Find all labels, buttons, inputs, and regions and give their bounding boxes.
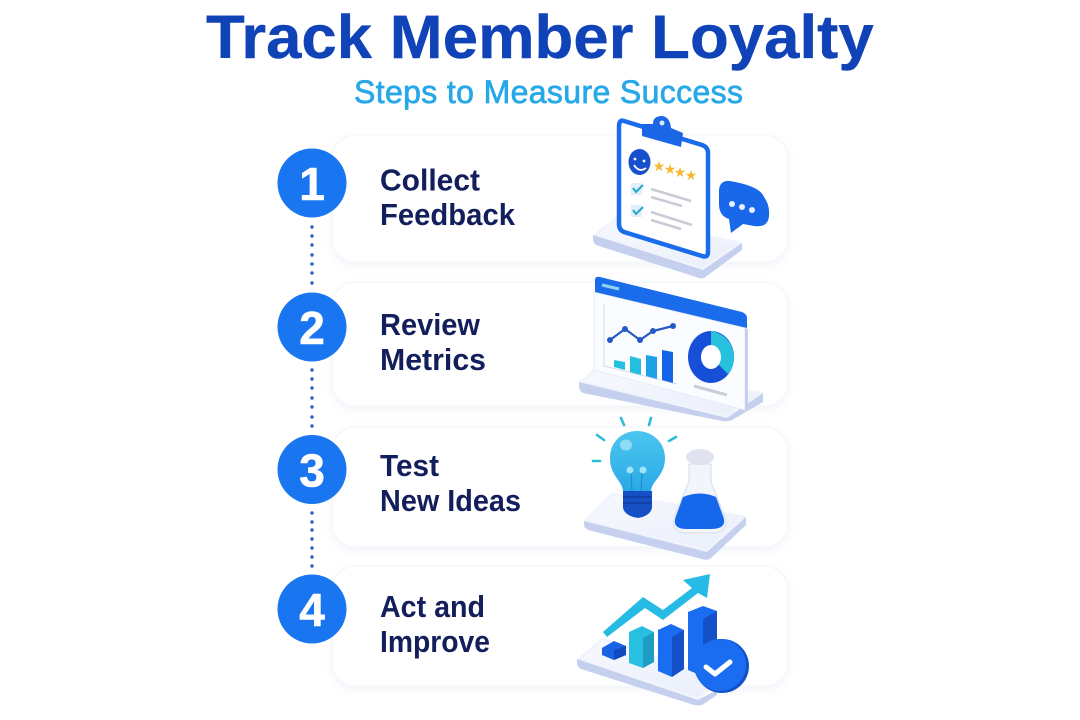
badge 3: 3 [299,444,325,496]
icon: clipboard with feedback: ★ [653,159,665,175]
badge 3 [278,435,346,504]
label: Collect Feedback: Feedback [380,197,516,232]
icon: clipboard with feedback: ★ [664,162,676,178]
label: Act and Improve: Improve [380,624,490,659]
label: Test New Ideas: New Ideas [380,483,521,518]
label: Review Metrics [380,307,486,377]
panel: step 2 [278,277,788,421]
label: Collect Feedback [380,162,516,232]
subtitle: Steps to Measure Success [354,74,743,110]
label: Test New Ideas [380,448,521,518]
badge 2: 2 [299,302,325,354]
icon: clipboard with feedback [593,116,769,278]
panel: step 1 [278,116,788,278]
card 2 [332,282,788,406]
icon: growth chart with check [577,574,749,706]
label: Act and Improve [380,589,490,659]
label: Collect Feedback: Collect [380,162,480,198]
label: Review Metrics: Review [380,307,481,342]
icon: clipboard with feedback: ★ [674,165,686,181]
badge 4 [278,574,346,644]
card 4 [332,566,788,686]
title: Track Member Loyalty [206,4,874,72]
label: Review Metrics: Metrics [380,342,486,377]
label: Act and Improve: Act and [380,589,485,624]
icon: clipboard with feedback: ★ [685,168,697,184]
badge 2 [278,292,346,362]
panel: step 4 [278,566,788,706]
icon: metrics dashboard [579,277,763,421]
panel: step 3 [278,418,788,560]
badge 1 [278,148,346,218]
card 1 [332,135,788,262]
icon: light bulb and flask [584,418,746,560]
label: Test New Ideas: Test [380,448,439,483]
card 3 [332,427,788,547]
badge 1: 1 [299,158,325,210]
step connector dots [310,225,314,568]
badge 4: 4 [299,584,325,636]
